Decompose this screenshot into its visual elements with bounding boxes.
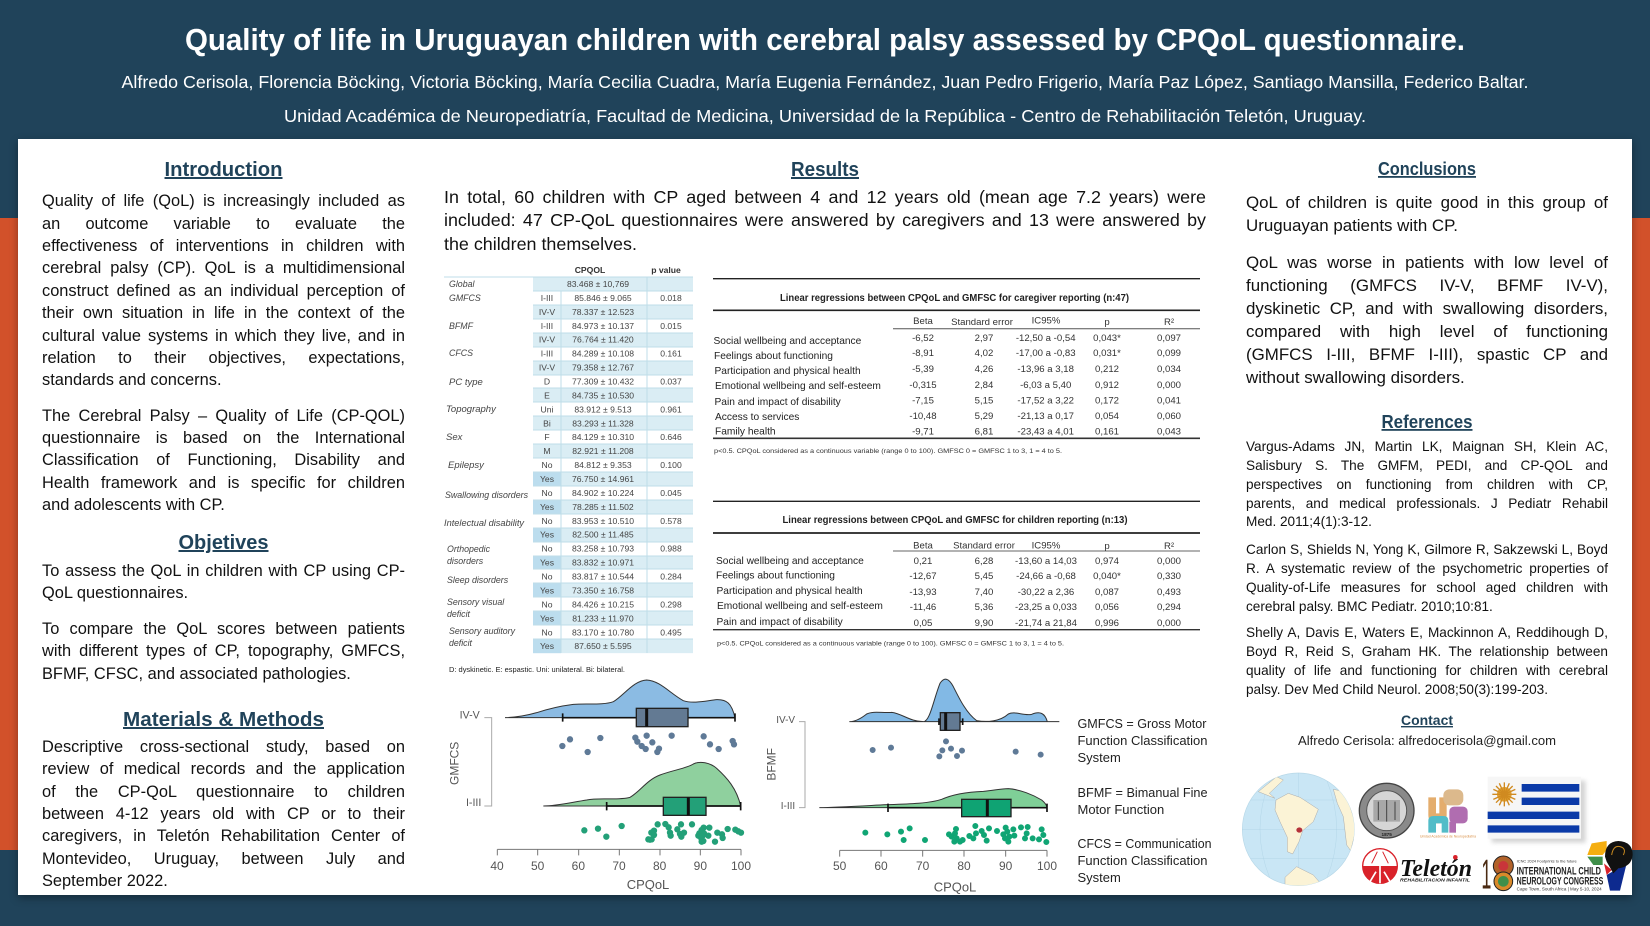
table: CPQOL descriptive statistics: deficit bbox=[449, 638, 473, 648]
table: CPQOL descriptive statistics: 73.350 ± 16.758 bbox=[572, 586, 634, 596]
table: regression for caregiver reporting: 0,172 bbox=[1095, 396, 1119, 406]
chart: GMFCS raincloud plot: 70 bbox=[612, 859, 626, 873]
table: regression for caregiver reporting: 0,000 bbox=[1157, 380, 1181, 391]
table: CPQOL descriptive statistics: I-III bbox=[541, 321, 553, 331]
table: regression for caregiver reporting: Emotional wellbeing and self-esteem bbox=[715, 381, 881, 392]
table: CPQOL descriptive statistics: Yes bbox=[540, 613, 554, 623]
table: regression for caregiver reporting: 0,161 bbox=[1095, 426, 1119, 438]
table: CPQOL descriptive statistics: F bbox=[544, 432, 550, 442]
heading: contact: Contact bbox=[1401, 712, 1453, 728]
text block: conclusion 2: compared with high level of functioning bbox=[1246, 322, 1608, 341]
table: regression for children reporting: Feelings about functioning bbox=[716, 570, 835, 582]
table: regression for children reporting: Pain and impact of disability bbox=[716, 617, 844, 628]
table: regression for children reporting: R² bbox=[1164, 541, 1175, 552]
table: regression for children reporting: 7,40 bbox=[975, 587, 993, 598]
legend: abbreviations: CFCS = Communication bbox=[1078, 836, 1212, 851]
table: regression for caregiver reporting: Standard error bbox=[951, 317, 1014, 328]
table: regression for caregiver reporting: Pain and impact of disability bbox=[714, 397, 842, 408]
table: CPQOL descriptive statistics: 0.495 bbox=[660, 627, 682, 637]
table: regression for children reporting: 9,90 bbox=[975, 618, 993, 629]
table: regression for caregiver reporting: 0,912 bbox=[1095, 380, 1119, 391]
chart: GMFCS raincloud plot: CPQoL bbox=[627, 877, 669, 892]
text block: objective 1 bbox=[42, 562, 405, 602]
reference 1: Med. 2011;4(1):3-12. bbox=[1246, 514, 1372, 529]
text block: introduction paragraph 1: relation to their objectives, expectations, bbox=[42, 349, 405, 367]
table: regression for caregiver reporting: R² bbox=[1164, 317, 1175, 328]
table: regression for children reporting: IC95% bbox=[1032, 540, 1061, 552]
table: CPQOL descriptive statistics: No bbox=[542, 572, 553, 582]
reference 3: Shelly A, Davis E, Waters E, Mackinnon A, Reddihough D, bbox=[1246, 625, 1608, 640]
table: regression for children reporting: 5,45 bbox=[975, 571, 993, 582]
table: CPQOL descriptive statistics: 0.298 bbox=[660, 599, 682, 609]
affiliation: Unidad Académica de Neuropediatría, Facultad de Medicina, Universidad de la República - Centro de Rehabilitación Teletón, Uruguay. bbox=[284, 106, 1366, 126]
table: regression for caregiver reporting: 0,054 bbox=[1095, 411, 1120, 422]
table: regression for children reporting: 0,974 bbox=[1095, 556, 1120, 567]
table: CPQOL descriptive statistics: 0.988 bbox=[660, 544, 682, 554]
table: CPQOL descriptive statistics bbox=[444, 265, 693, 653]
text block: results summary: the children themselves. bbox=[444, 234, 637, 254]
table: regression for caregiver reporting: 4,26 bbox=[975, 364, 993, 375]
table: regression for caregiver reporting: -6,52 bbox=[912, 333, 934, 344]
table: CPQOL descriptive statistics: No bbox=[542, 460, 553, 470]
table: regression for children reporting: Participation and physical health bbox=[716, 586, 863, 597]
table: CPQOL descriptive statistics: No bbox=[542, 544, 553, 554]
table: CPQOL descriptive statistics: 84.973 ± 10.137 bbox=[572, 321, 634, 331]
text block: conclusion 2: without swallowing disorders. bbox=[1246, 368, 1465, 387]
legend: abbreviations: Function Classification bbox=[1078, 733, 1208, 748]
table: regression for caregiver reporting: Linear regressions between CPQoL and GMFSC for caregiver reporting (n:47) bbox=[780, 293, 1129, 304]
table: CPQOL descriptive statistics: Yes bbox=[540, 474, 554, 484]
text block: introduction paragraph 1: cultural value systems in which they live, and in bbox=[42, 327, 405, 345]
table: CPQOL descriptive statistics: IV-V bbox=[539, 307, 555, 317]
table: CPQOL descriptive statistics: 85.846 ± 9.065 bbox=[574, 293, 632, 303]
legend: abbreviations: GMFCS = Gross Motor bbox=[1078, 716, 1207, 731]
table: regression for children reporting: p bbox=[1104, 541, 1110, 552]
table: CPQOL descriptive statistics: 82.500 ± 11.485 bbox=[572, 530, 634, 540]
table: CPQOL descriptive statistics: 83.170 ± 10.780 bbox=[572, 627, 634, 637]
table: CPQOL descriptive statistics: 83.953 ± 10.510 bbox=[572, 516, 634, 526]
chart: GMFCS raincloud plot: I-III bbox=[466, 797, 481, 809]
icon: International Child Neurology Congress logo: INTERNATIONAL CHILD bbox=[1517, 865, 1601, 877]
table: regression for caregiver reporting: -0,315 bbox=[909, 380, 937, 391]
table: CPQOL descriptive statistics: E bbox=[544, 390, 550, 400]
chart: BFMF raincloud plot: 90 bbox=[999, 859, 1013, 873]
table: regression for caregiver reporting: -13,96 a 3,18 bbox=[1017, 364, 1074, 375]
reference 3 bbox=[1246, 625, 1608, 697]
text block: materials and methods: Descriptive cross-sectional study, based on bbox=[42, 738, 405, 756]
table: regression for children reporting: -11,46 bbox=[910, 602, 936, 613]
text block: conclusion 1 bbox=[1246, 193, 1608, 235]
legend: abbreviations: BFMF = Bimanual Fine bbox=[1078, 785, 1208, 800]
table: CPQOL descriptive statistics: 83.912 ± 9.513 bbox=[574, 404, 632, 414]
table: regression for children reporting: -24,66 a -0,68 bbox=[1016, 571, 1076, 582]
text block: introduction paragraph 1: an outcome variable to evaluate the bbox=[42, 215, 405, 233]
table: regression for children reporting: -13,60 a 14,03 bbox=[1015, 556, 1077, 567]
table: regression for caregiver reporting: -12,50 a -0,54 bbox=[1016, 333, 1076, 344]
heading: objetives: Objetives bbox=[178, 532, 268, 554]
table: regression for children reporting: Beta bbox=[913, 540, 934, 552]
chart: BFMF raincloud plot bbox=[764, 679, 1059, 895]
table: CPQOL descriptive statistics: 84.902 ± 10.224 bbox=[572, 488, 634, 498]
icon: Uruguay flag bbox=[1488, 777, 1586, 843]
reference 2 bbox=[1246, 542, 1608, 614]
text block: introduction paragraph 1: cerebral palsy (CP). QoL is a multidimensional bbox=[42, 259, 405, 277]
contact email: Alfredo Cerisola: alfredocerisola@gmail.com bbox=[1298, 733, 1556, 748]
chart: BFMF raincloud plot: 70 bbox=[916, 859, 930, 873]
table: regression for caregiver reporting: 5,29 bbox=[975, 411, 993, 422]
reference 1: Salisbury S. The GMFM, PEDI, and CP-QOL and bbox=[1246, 458, 1608, 473]
table: regression for caregiver reporting: Feelings about functioning bbox=[714, 351, 833, 362]
reference 2: Carlon S, Shields N, Yong K, Gilmore R, Sakzewski L, Boyd bbox=[1246, 542, 1608, 557]
chart: GMFCS raincloud plot: 90 bbox=[694, 859, 707, 873]
text block: materials and methods: September 2022. bbox=[42, 872, 168, 890]
table: regression for children reporting: Standard error bbox=[953, 540, 1016, 552]
text block: results summary bbox=[444, 186, 1206, 254]
table: CPQOL descriptive statistics: No bbox=[542, 516, 553, 526]
table: CPQOL descriptive statistics: Sensory visual bbox=[447, 597, 505, 607]
text block: objective 1: QoL questionnaires. bbox=[42, 584, 188, 602]
table: regression for caregiver reporting: 2,97 bbox=[975, 333, 993, 344]
text block: objective 2 bbox=[42, 620, 405, 682]
table: CPQOL descriptive statistics: PC type bbox=[449, 377, 483, 388]
text block: conclusion 2: dyskinetic CP, and with swallowing disorders, bbox=[1246, 299, 1608, 318]
chart: BFMF raincloud plot: IV-V bbox=[776, 715, 795, 726]
text block: materials and methods: of the CP-QoL questionnaire to children bbox=[42, 783, 405, 801]
table: regression for caregiver reporting: 0,212 bbox=[1095, 364, 1119, 375]
table: CPQOL descriptive statistics: Yes bbox=[540, 641, 554, 651]
table: CPQOL descriptive statistics: I-III bbox=[541, 349, 553, 359]
icon: International Child Neurology Congress logo: Cape Town, South Africa | May 5-10, 2024 bbox=[1517, 887, 1602, 893]
table: regression for caregiver reporting: 5,15 bbox=[975, 396, 993, 406]
table: CPQOL descriptive statistics: IV-V bbox=[539, 335, 555, 345]
table: CPQOL descriptive statistics: Intelectual disability bbox=[444, 518, 525, 528]
table: regression for children reporting: 0,996 bbox=[1095, 618, 1119, 629]
table: regression for caregiver reporting: Access to services bbox=[715, 412, 799, 423]
text block: materials and methods: review of medical records and the application bbox=[42, 760, 405, 778]
table: CPQOL descriptive statistics: Swallowing disorders bbox=[445, 490, 529, 500]
table: regression for children reporting: -30,22 a 2,36 bbox=[1018, 587, 1074, 598]
table: CPQOL descriptive statistics: 78.285 ± 11.502 bbox=[572, 502, 634, 512]
table: regression for children reporting: Linear regressions between CPQoL and GMFSC for children reporting (n:13) bbox=[782, 515, 1128, 526]
title: Quality of life in Uruguayan children with cerebral palsy assessed by CPQoL questionnaire. bbox=[185, 23, 1465, 57]
chart: BFMF raincloud plot: I-III bbox=[781, 801, 795, 812]
table: CPQOL descriptive statistics: Global bbox=[449, 279, 475, 289]
table: CPQOL descriptive statistics: 0.284 bbox=[660, 572, 682, 582]
text block: conclusion 2 bbox=[1246, 253, 1608, 387]
reference 3: palsy. Dev Med Child Neurol. 2008;50(3):199-203. bbox=[1246, 682, 1548, 697]
chart: GMFCS raincloud plot: GMFCS bbox=[448, 742, 462, 785]
text block: results summary: included: 47 CP-QoL questionnaires were answered by caregivers and 13 were answered by bbox=[444, 210, 1206, 230]
table: CPQOL descriptive statistics: Bi bbox=[543, 418, 551, 428]
table: regression for caregiver reporting bbox=[713, 279, 1200, 455]
table: regression for caregiver reporting: -5,39 bbox=[912, 364, 934, 375]
chart: GMFCS raincloud plot: 50 bbox=[531, 859, 545, 873]
table: CPQOL descriptive statistics: 76.750 ± 14.961 bbox=[572, 474, 634, 484]
table: CPQOL descriptive statistics: 78.337 ± 12.523 bbox=[572, 307, 634, 317]
chart: BFMF raincloud plot: 80 bbox=[957, 859, 971, 873]
table: CPQOL descriptive statistics: 84.289 ± 10.108 bbox=[572, 349, 634, 359]
table: CPQOL descriptive statistics: Yes bbox=[540, 502, 554, 512]
chart: GMFCS raincloud plot bbox=[448, 680, 751, 892]
table: CPQOL descriptive statistics: 83.293 ± 11.328 bbox=[572, 418, 634, 428]
text block: conclusion 2: functioning (GMFCS IV-V, BFMF IV-V), bbox=[1246, 276, 1608, 295]
icon: International Child Neurology Congress logo: ICNC 2024 Footprints to the future bbox=[1517, 859, 1577, 864]
table: CPQOL descriptive statistics: 76.764 ± 11.420 bbox=[572, 335, 634, 345]
table: regression for caregiver reporting: 4,02 bbox=[975, 348, 993, 359]
table: regression for caregiver reporting: 0,043* bbox=[1093, 333, 1121, 344]
table: CPQOL descriptive statistics: CPQOL bbox=[575, 265, 605, 275]
table: CPQOL descriptive statistics: IV-V bbox=[539, 363, 555, 373]
chart: BFMF raincloud plot: 60 bbox=[874, 859, 888, 873]
reference 2: cerebral palsy. BMC Pediatr. 2010;10:81. bbox=[1246, 599, 1493, 614]
table: CPQOL descriptive statistics: 84.812 ± 9.353 bbox=[574, 460, 632, 470]
table: regression for children reporting: -13,93 bbox=[909, 587, 937, 598]
table: CPQOL descriptive statistics: 84.129 ± 10.310 bbox=[572, 432, 634, 442]
table: regression for children reporting: 0,294 bbox=[1157, 602, 1182, 613]
text block: materials and methods: Montevideo, Uruguay, between July and bbox=[42, 850, 405, 868]
text block: introduction paragraph 2: Health framework and is specific for children bbox=[42, 474, 405, 492]
reference 1: perspectives on functioning from children with CP, bbox=[1246, 477, 1608, 492]
table: regression for caregiver reporting: p<0.5. CPQoL considered as a continuous variable (range 0 to 100). GMFSC 0 = GMFSC 1 to 3, 1 = 4 to 5. bbox=[714, 448, 1062, 455]
table: CPQOL descriptive statistics: 0.646 bbox=[660, 432, 682, 442]
icon: UMP unit logo bbox=[1420, 789, 1477, 838]
chart: GMFCS raincloud plot: 80 bbox=[653, 859, 667, 873]
legend: abbreviations bbox=[1078, 716, 1212, 885]
chart: GMFCS raincloud plot: 40 bbox=[490, 859, 504, 873]
table: CPQOL descriptive statistics: Sex bbox=[446, 432, 464, 443]
table: regression for caregiver reporting: 6,81 bbox=[975, 426, 993, 438]
reference 1: Vargus-Adams JN, Martin LK, Maignan SH, Klein AC, bbox=[1246, 439, 1608, 454]
reference 3: quality of life and functioning for children with cerebral bbox=[1246, 663, 1608, 678]
icon: Teletón logo bbox=[1363, 849, 1472, 883]
heading: introduction: Introduction bbox=[164, 159, 282, 181]
table: regression for caregiver reporting: Family health bbox=[715, 426, 776, 438]
table: CPQOL descriptive statistics: Sleep disorders bbox=[447, 575, 509, 585]
table: CPQOL descriptive statistics: 0.037 bbox=[660, 376, 682, 386]
table: CPQOL descriptive statistics: 0.045 bbox=[660, 488, 682, 498]
table: regression for children reporting: 0,493 bbox=[1157, 587, 1181, 598]
text block: conclusion 1: QoL of children is quite good in this group of bbox=[1246, 193, 1608, 212]
table: CPQOL descriptive statistics: 77.309 ± 10.432 bbox=[572, 376, 634, 386]
table: CPQOL descriptive statistics: disorders bbox=[447, 556, 484, 566]
table: CPQOL descriptive statistics: No bbox=[542, 488, 553, 498]
heading: conclusions: Conclusions bbox=[1378, 159, 1476, 179]
legend: abbreviations: Function Classification bbox=[1078, 853, 1208, 868]
table: CPQOL descriptive statistics: 82.921 ± 11.208 bbox=[572, 446, 634, 456]
table footnote: D: dyskinetic. E: espastic. Uni: unilateral. Bi: bilateral. bbox=[449, 665, 625, 674]
table: CPQOL descriptive statistics: 84.426 ± 10.215 bbox=[572, 599, 634, 609]
text block: materials and methods: between 4-12 years old with CP or to their bbox=[42, 805, 405, 823]
text block: results summary: In total, 60 children with CP aged between 4 and 12 years old (mean age 7.2 years) were bbox=[444, 186, 1206, 206]
table: CPQOL descriptive statistics: 0.578 bbox=[660, 516, 682, 526]
table: regression for children reporting: -12,67 bbox=[909, 571, 937, 582]
table: regression for children reporting: 6,28 bbox=[975, 556, 993, 567]
text block: introduction paragraph 2: Classification of Functioning, Disability and bbox=[42, 451, 405, 469]
legend: abbreviations: System bbox=[1078, 870, 1121, 885]
table: regression for caregiver reporting: 0,099 bbox=[1157, 348, 1181, 359]
logos group bbox=[1242, 773, 1633, 897]
table: CPQOL descriptive statistics: Uni bbox=[541, 404, 554, 414]
table: CPQOL descriptive statistics: deficit bbox=[447, 609, 471, 619]
icon: Teletón logo: Teletón bbox=[1400, 855, 1472, 882]
table: regression for children reporting: 0,21 bbox=[914, 556, 932, 567]
table: regression for children reporting bbox=[713, 501, 1200, 648]
table: regression for caregiver reporting: -17,52 a 3,22 bbox=[1017, 396, 1074, 406]
table: regression for children reporting: 0,040* bbox=[1093, 571, 1121, 582]
orange band left bbox=[0, 218, 18, 850]
chart: BFMF raincloud plot: 100 bbox=[1037, 859, 1057, 873]
text block: objective 1: To assess the QoL in children with CP using CP- bbox=[42, 562, 405, 580]
table: regression for caregiver reporting: 0,031* bbox=[1093, 348, 1121, 359]
table: regression for children reporting: -21,74 a 21,84 bbox=[1015, 618, 1078, 629]
table: CPQOL descriptive statistics: 83.817 ± 10.544 bbox=[572, 572, 634, 582]
icon: globe with South America bbox=[1242, 773, 1357, 887]
chart: BFMF raincloud plot: BFMF bbox=[764, 748, 778, 781]
table: regression for caregiver reporting: 0,097 bbox=[1157, 333, 1181, 344]
text block: objective 2: To compare the QoL scores between patients bbox=[42, 620, 405, 638]
heading: results: Results bbox=[791, 159, 859, 181]
icon: university seal bbox=[1359, 783, 1414, 838]
table: CPQOL descriptive statistics: 0.961 bbox=[660, 404, 682, 414]
icon: UMP unit logo: Unidad Académica de Neuropediatría bbox=[1420, 834, 1477, 838]
table: regression for children reporting: Social wellbeing and acceptance bbox=[716, 556, 864, 567]
reference 3: Boyd R, Reid S, Graham HK. The relationship between bbox=[1246, 644, 1608, 659]
reference 2: Quality-of-Life measures for school aged children with bbox=[1246, 580, 1608, 595]
text block: introduction paragraph 1 bbox=[42, 192, 405, 389]
authors: Alfredo Cerisola, Florencia Böcking, Victoria Böcking, María Cecilia Cuadra, María Eugenia Fernández, Juan Pedro Frigerio, María Paz López, Santiago Mansilla, Federico Baltar. bbox=[122, 72, 1528, 92]
table: CPQOL descriptive statistics: I-III bbox=[541, 293, 553, 303]
reference 1 bbox=[1246, 439, 1608, 529]
table: CPQOL descriptive statistics: 0.161 bbox=[660, 349, 682, 359]
table: regression for caregiver reporting: 0,034 bbox=[1157, 364, 1182, 375]
table: regression for caregiver reporting: -9,71 bbox=[912, 426, 934, 438]
table: regression for children reporting: 0,000 bbox=[1157, 618, 1181, 629]
table: regression for caregiver reporting: 2,84 bbox=[975, 380, 994, 391]
text block: conclusion 2: QoL was worse in patients with low level of bbox=[1246, 253, 1608, 272]
text block: introduction paragraph 2: The Cerebral Palsy – Quality of Life (CP-QOL) bbox=[42, 406, 405, 424]
table: CPQOL descriptive statistics: Yes bbox=[540, 558, 554, 568]
table: CPQOL descriptive statistics: 83.832 ± 10.971 bbox=[572, 558, 634, 568]
table: CPQOL descriptive statistics: 0.015 bbox=[660, 321, 682, 331]
table: regression for caregiver reporting: p bbox=[1104, 317, 1110, 328]
table: regression for caregiver reporting: -8,91 bbox=[912, 348, 934, 359]
table: CPQOL descriptive statistics: M bbox=[543, 446, 551, 456]
table: regression for caregiver reporting: 0,041 bbox=[1157, 396, 1181, 406]
table: CPQOL descriptive statistics: Epilepsy bbox=[448, 460, 485, 471]
reference 1: parents, and medical professionals. J Pediatr Rehabil bbox=[1246, 496, 1608, 511]
table: CPQOL descriptive statistics: 83.258 ± 10.793 bbox=[572, 544, 634, 554]
table: regression for children reporting: 0,330 bbox=[1157, 571, 1181, 582]
chart: GMFCS raincloud plot: 60 bbox=[572, 859, 585, 873]
reference 2: R. A systematic review of the psychometric properties of bbox=[1246, 561, 1608, 576]
table: regression for children reporting: 0,000 bbox=[1157, 556, 1181, 567]
table: CPQOL descriptive statistics: D bbox=[544, 376, 550, 386]
table: CPQOL descriptive statistics: 87.650 ± 5.595 bbox=[574, 641, 632, 651]
table: CPQOL descriptive statistics: 83.468 ± 10,769 bbox=[567, 279, 629, 289]
text block: materials and methods: caregivers, in Teletón Rehabilitation Center of bbox=[42, 827, 405, 845]
text block: introduction paragraph 2 bbox=[42, 406, 405, 514]
table: CPQOL descriptive statistics: BFMF bbox=[449, 321, 474, 331]
heading: materials and methods: Materials & Methods bbox=[123, 709, 324, 731]
table: CPQOL descriptive statistics: p value bbox=[651, 265, 681, 275]
legend: abbreviations: System bbox=[1078, 750, 1121, 765]
table: CPQOL descriptive statistics: No bbox=[542, 599, 553, 609]
text block: introduction paragraph 1: effectiveness of interventions in children with bbox=[42, 237, 405, 255]
table: regression for caregiver reporting: -6,03 a 5,40 bbox=[1020, 380, 1071, 391]
table: regression for caregiver reporting: -21,13 a 0,17 bbox=[1017, 411, 1074, 422]
text block: introduction paragraph 2: questionnaire is based on the International bbox=[42, 429, 405, 447]
table: regression for children reporting: 0,056 bbox=[1095, 602, 1119, 613]
text block: materials and methods bbox=[42, 738, 405, 890]
table: regression for caregiver reporting: -23,43 a 4,01 bbox=[1017, 426, 1074, 438]
heading: references: References bbox=[1382, 412, 1472, 432]
orange band right bbox=[1632, 218, 1650, 850]
text block: introduction paragraph 1: construct defined as an individual perception of bbox=[42, 282, 405, 300]
text block: conclusion 2: (GMFCS I-III, BFMF I-III), spastic CP and bbox=[1246, 345, 1608, 364]
table: regression for caregiver reporting: Beta bbox=[913, 316, 934, 327]
text block: introduction paragraph 1: standards and concerns. bbox=[42, 371, 222, 389]
table: regression for caregiver reporting: -17,00 a -0,83 bbox=[1016, 348, 1076, 359]
text block: introduction paragraph 1: their own situation in life in the context of the bbox=[42, 304, 405, 322]
table: regression for caregiver reporting: -7,15 bbox=[912, 396, 934, 406]
white content panel bbox=[18, 139, 1632, 895]
table: regression for children reporting: 5,36 bbox=[975, 602, 993, 613]
icon: International Child Neurology Congress logo: 1 bbox=[1481, 850, 1491, 897]
table: CPQOL descriptive statistics: 0.100 bbox=[660, 460, 682, 470]
table: CPQOL descriptive statistics: No bbox=[542, 627, 553, 637]
table: regression for children reporting: Emotional wellbeing and self-esteem bbox=[717, 601, 883, 612]
table: regression for children reporting: 0,087 bbox=[1095, 587, 1119, 598]
table: regression for caregiver reporting: 0,060 bbox=[1157, 411, 1181, 422]
chart: BFMF raincloud plot: 50 bbox=[833, 859, 847, 873]
table: CPQOL descriptive statistics: CFCS bbox=[449, 348, 473, 358]
table: regression for caregiver reporting: 0,043 bbox=[1157, 426, 1181, 438]
table: CPQOL descriptive statistics: Orthopedic bbox=[447, 544, 491, 554]
table: CPQOL descriptive statistics: 0.018 bbox=[660, 293, 682, 303]
table: CPQOL descriptive statistics: 79.358 ± 12.767 bbox=[572, 363, 634, 373]
text block: objective 2: with different types of CP, topography, GMFCS, bbox=[42, 642, 405, 660]
table: CPQOL descriptive statistics: 84.735 ± 10.530 bbox=[572, 390, 634, 400]
table: CPQOL descriptive statistics: Topography bbox=[446, 404, 497, 415]
table: regression for children reporting: 0,05 bbox=[914, 618, 932, 629]
table: regression for children reporting: p<0.5. CPQoL considered as a continuous variable (range 0 to 100). GMFSC 0 = GMFSC 1 to 3, 1 = 4 to 5. bbox=[717, 640, 1064, 648]
table: regression for caregiver reporting: Social wellbeing and acceptance bbox=[714, 336, 862, 347]
table: regression for children reporting: -23,25 a 0,033 bbox=[1015, 602, 1077, 613]
text block: introduction paragraph 2: and adolescents with CP. bbox=[42, 496, 225, 514]
table: regression for caregiver reporting: Participation and physical health bbox=[714, 366, 861, 377]
table: CPQOL descriptive statistics: Yes bbox=[540, 530, 554, 540]
icon: Teletón logo: REHABILITACION INFANTIL bbox=[1400, 878, 1470, 883]
table: regression for caregiver reporting: -10,48 bbox=[909, 411, 937, 422]
table: CPQOL descriptive statistics: Sensory auditory bbox=[449, 626, 516, 636]
text block: objective 2: BFMF, CFSC, and associated pathologies. bbox=[42, 664, 351, 682]
chart: GMFCS raincloud plot: 100 bbox=[731, 859, 751, 873]
chart: GMFCS raincloud plot: IV-V bbox=[460, 709, 481, 721]
text block: conclusion 1: Uruguayan patients with CP. bbox=[1246, 216, 1458, 235]
icon: university seal: 1875 bbox=[1381, 832, 1392, 837]
text block: introduction paragraph 1: Quality of life (QoL) is increasingly included as bbox=[42, 192, 405, 210]
table: CPQOL descriptive statistics: 81.233 ± 11.970 bbox=[572, 613, 634, 623]
legend: abbreviations: Motor Function bbox=[1078, 802, 1164, 817]
chart: BFMF raincloud plot: CPQoL bbox=[934, 880, 976, 895]
icon: International Child Neurology Congress logo bbox=[1481, 841, 1633, 897]
table: CPQOL descriptive statistics: GMFCS bbox=[449, 293, 481, 303]
table: regression for caregiver reporting: IC95% bbox=[1032, 316, 1061, 326]
table: CPQOL descriptive statistics: Yes bbox=[540, 586, 554, 596]
